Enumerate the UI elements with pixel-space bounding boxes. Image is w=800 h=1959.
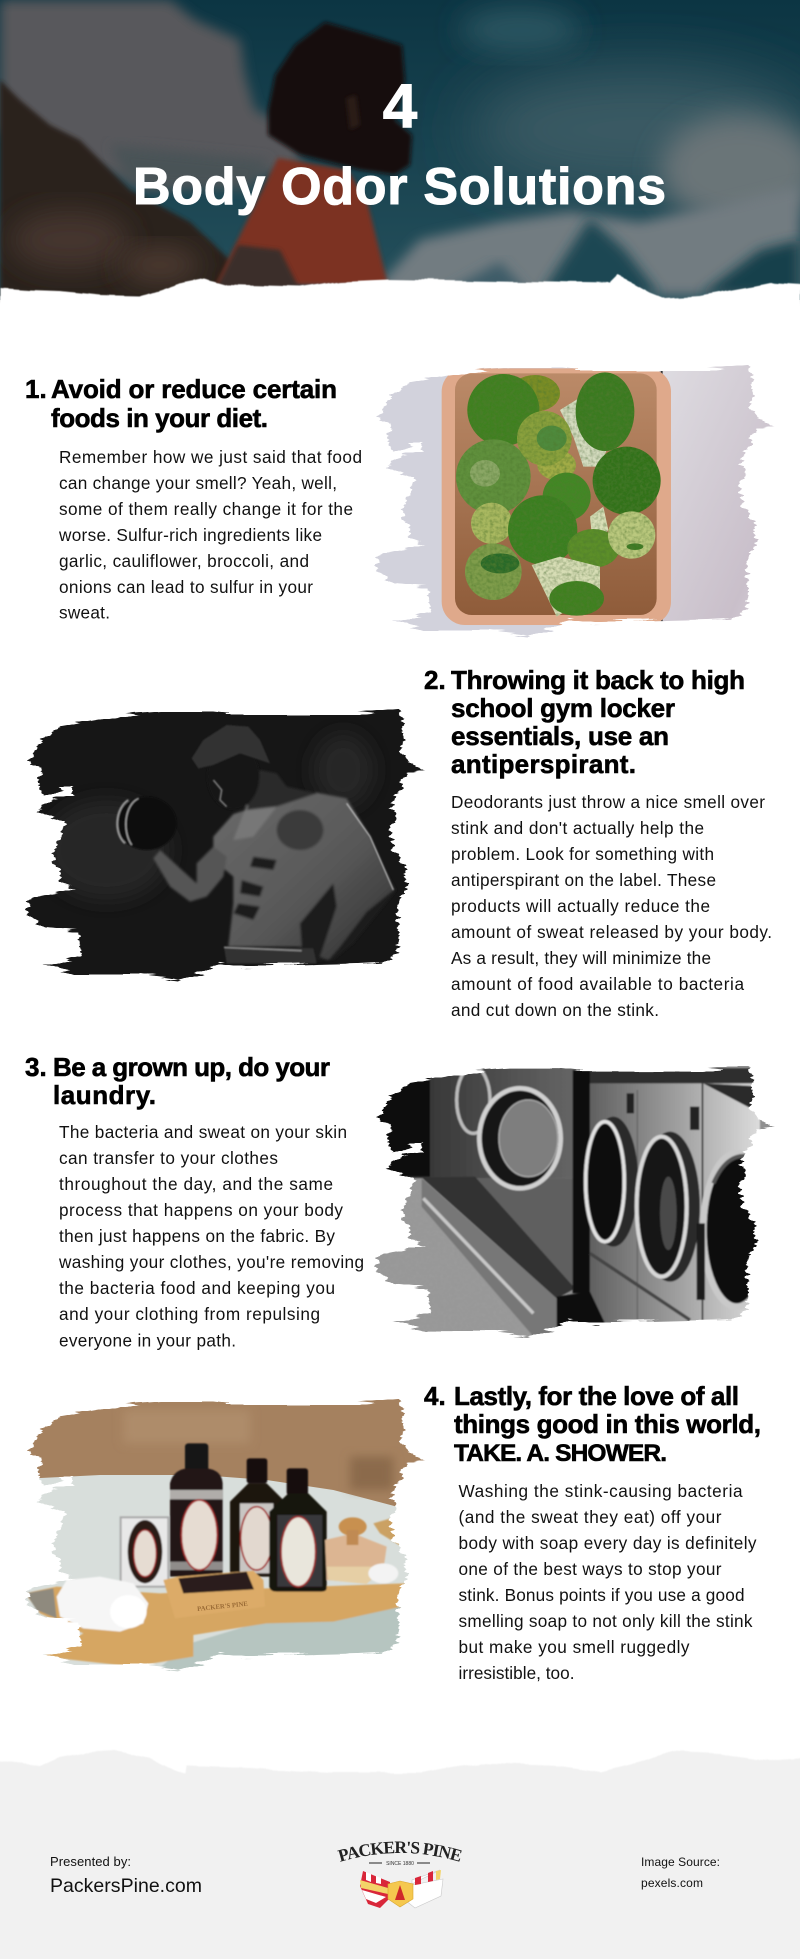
heading 1: foods in your diet. bbox=[51, 403, 268, 433]
footer: image source: Image Source: bbox=[641, 1855, 720, 1869]
heading 2: essentials, use an bbox=[451, 721, 669, 751]
body text 4: but make you smell ruggedly bbox=[458, 1637, 690, 1657]
photo: grooming products on bath tray: PACKER'S PINE bbox=[197, 1601, 249, 1613]
person silhouette bbox=[215, 22, 412, 290]
heading 2: antiperspirant. bbox=[451, 749, 636, 779]
body text 4: one of the best ways to stop your bbox=[458, 1559, 722, 1579]
body text 1: garlic, cauliflower, broccoli, and bbox=[59, 551, 309, 571]
footer: presented by: PackersPine.com bbox=[50, 1875, 202, 1897]
body text 3: washing your clothes, you're removing bbox=[58, 1252, 364, 1272]
header photo bbox=[0, 0, 800, 300]
photo: grooming products on bath tray bbox=[25, 1399, 425, 1672]
heading 4: things good in this world, bbox=[454, 1409, 761, 1439]
body text 2: products will actually reduce the bbox=[451, 896, 710, 916]
body text 3: The bacteria and sweat on your skin bbox=[59, 1122, 347, 1142]
body text 3: and your clothing from repulsing bbox=[59, 1304, 320, 1324]
body text 4: irresistible, too. bbox=[458, 1663, 574, 1683]
body text 1 bbox=[58, 447, 362, 622]
body text 3: process that happens on your body bbox=[59, 1200, 343, 1220]
section 2 bbox=[0, 665, 772, 1020]
body text 2: problem. Look for something with bbox=[451, 844, 714, 864]
body text 3: can transfer to your clothes bbox=[59, 1148, 278, 1168]
body text 3 bbox=[58, 1122, 364, 1350]
section 1 bbox=[26, 365, 774, 638]
body text 4: (and the sweat they eat) off your bbox=[458, 1507, 722, 1527]
heading 3: Be a grown up, do your bbox=[53, 1052, 330, 1082]
body text 2: As a result, they will minimize the bbox=[451, 948, 711, 968]
photo: row of washing machines bbox=[374, 1066, 774, 1338]
body text 4: stink. Bonus points if you use a good bbox=[458, 1585, 744, 1605]
footer: presented by: Presented by: bbox=[50, 1854, 131, 1869]
body text 2 bbox=[451, 792, 772, 1020]
body text 3: everyone in your path. bbox=[59, 1330, 236, 1350]
footer: presented by bbox=[50, 1854, 202, 1897]
footer: image source: pexels.com bbox=[641, 1876, 703, 1890]
body text 1: sweat. bbox=[59, 602, 110, 622]
title bbox=[133, 72, 666, 216]
footer: image source bbox=[641, 1855, 720, 1890]
footer: logo bbox=[337, 1842, 462, 1908]
body text 2: Deodorants just throw a nice smell over bbox=[451, 792, 765, 812]
body text 4 bbox=[458, 1481, 757, 1683]
heading 1: Avoid or reduce certain bbox=[51, 374, 337, 404]
torn paper edge bbox=[0, 275, 800, 330]
section 3 bbox=[0, 1052, 800, 1959]
heading 4: Lastly, for the love of all bbox=[454, 1381, 739, 1411]
heading 2: 2. bbox=[424, 665, 446, 695]
footer band bbox=[0, 1750, 800, 1959]
body text 2: amount of food available to bacteria bbox=[451, 974, 744, 994]
photo: broccoli in wooden tray bbox=[374, 365, 774, 638]
body text 2: antiperspirant on the label. These bbox=[451, 870, 716, 890]
body text 2: amount of sweat released by your body. bbox=[451, 922, 772, 942]
body text 3: the bacteria food and keeping you bbox=[59, 1278, 335, 1298]
body text 4: smelling soap to not only kill the stink bbox=[458, 1611, 753, 1631]
heading 2: Throwing it back to high bbox=[451, 665, 745, 695]
photo: man lifting dumbbell bbox=[25, 709, 425, 982]
body text 3: then just happens on the fabric. By bbox=[59, 1226, 335, 1246]
body text 1: some of them really change it for the bbox=[59, 499, 353, 519]
heading 3 bbox=[25, 1052, 330, 1110]
body text 1: worse. Sulfur-rich ingredients like bbox=[58, 525, 322, 545]
section 4 bbox=[0, 1380, 761, 1683]
footer: logo: PACKER'S PINE bbox=[337, 1842, 462, 1862]
heading 4: TAKE. A. SHOWER. bbox=[454, 1440, 667, 1467]
body text 1: onions can lead to sulfur in your bbox=[59, 577, 313, 597]
body text 3: throughout the day, and the same bbox=[59, 1174, 333, 1194]
heading 2: school gym locker bbox=[451, 693, 675, 723]
heading 1: 1. bbox=[25, 374, 47, 404]
heading 2 bbox=[424, 665, 745, 779]
heading 3: laundry. bbox=[53, 1080, 156, 1110]
body text 4: Washing the stink-causing bacteria bbox=[458, 1481, 743, 1501]
body text 2: stink and don't actually help the bbox=[451, 818, 704, 838]
title: 4 bbox=[383, 72, 418, 141]
footer: logo: SINCE 1880 bbox=[386, 1861, 414, 1867]
body text 1: Remember how we just said that food bbox=[59, 447, 362, 467]
body text 2: and cut down on the stink. bbox=[451, 1000, 659, 1020]
body text 1: can change your smell? Yeah, well, bbox=[59, 473, 337, 493]
heading 4 bbox=[424, 1381, 761, 1467]
heading 3: 3. bbox=[25, 1052, 47, 1082]
heading 1 bbox=[25, 374, 337, 433]
heading 4: 4. bbox=[424, 1381, 446, 1411]
title: Body Odor Solutions bbox=[133, 158, 666, 216]
body text 4: body with soap every day is definitely bbox=[458, 1533, 757, 1553]
